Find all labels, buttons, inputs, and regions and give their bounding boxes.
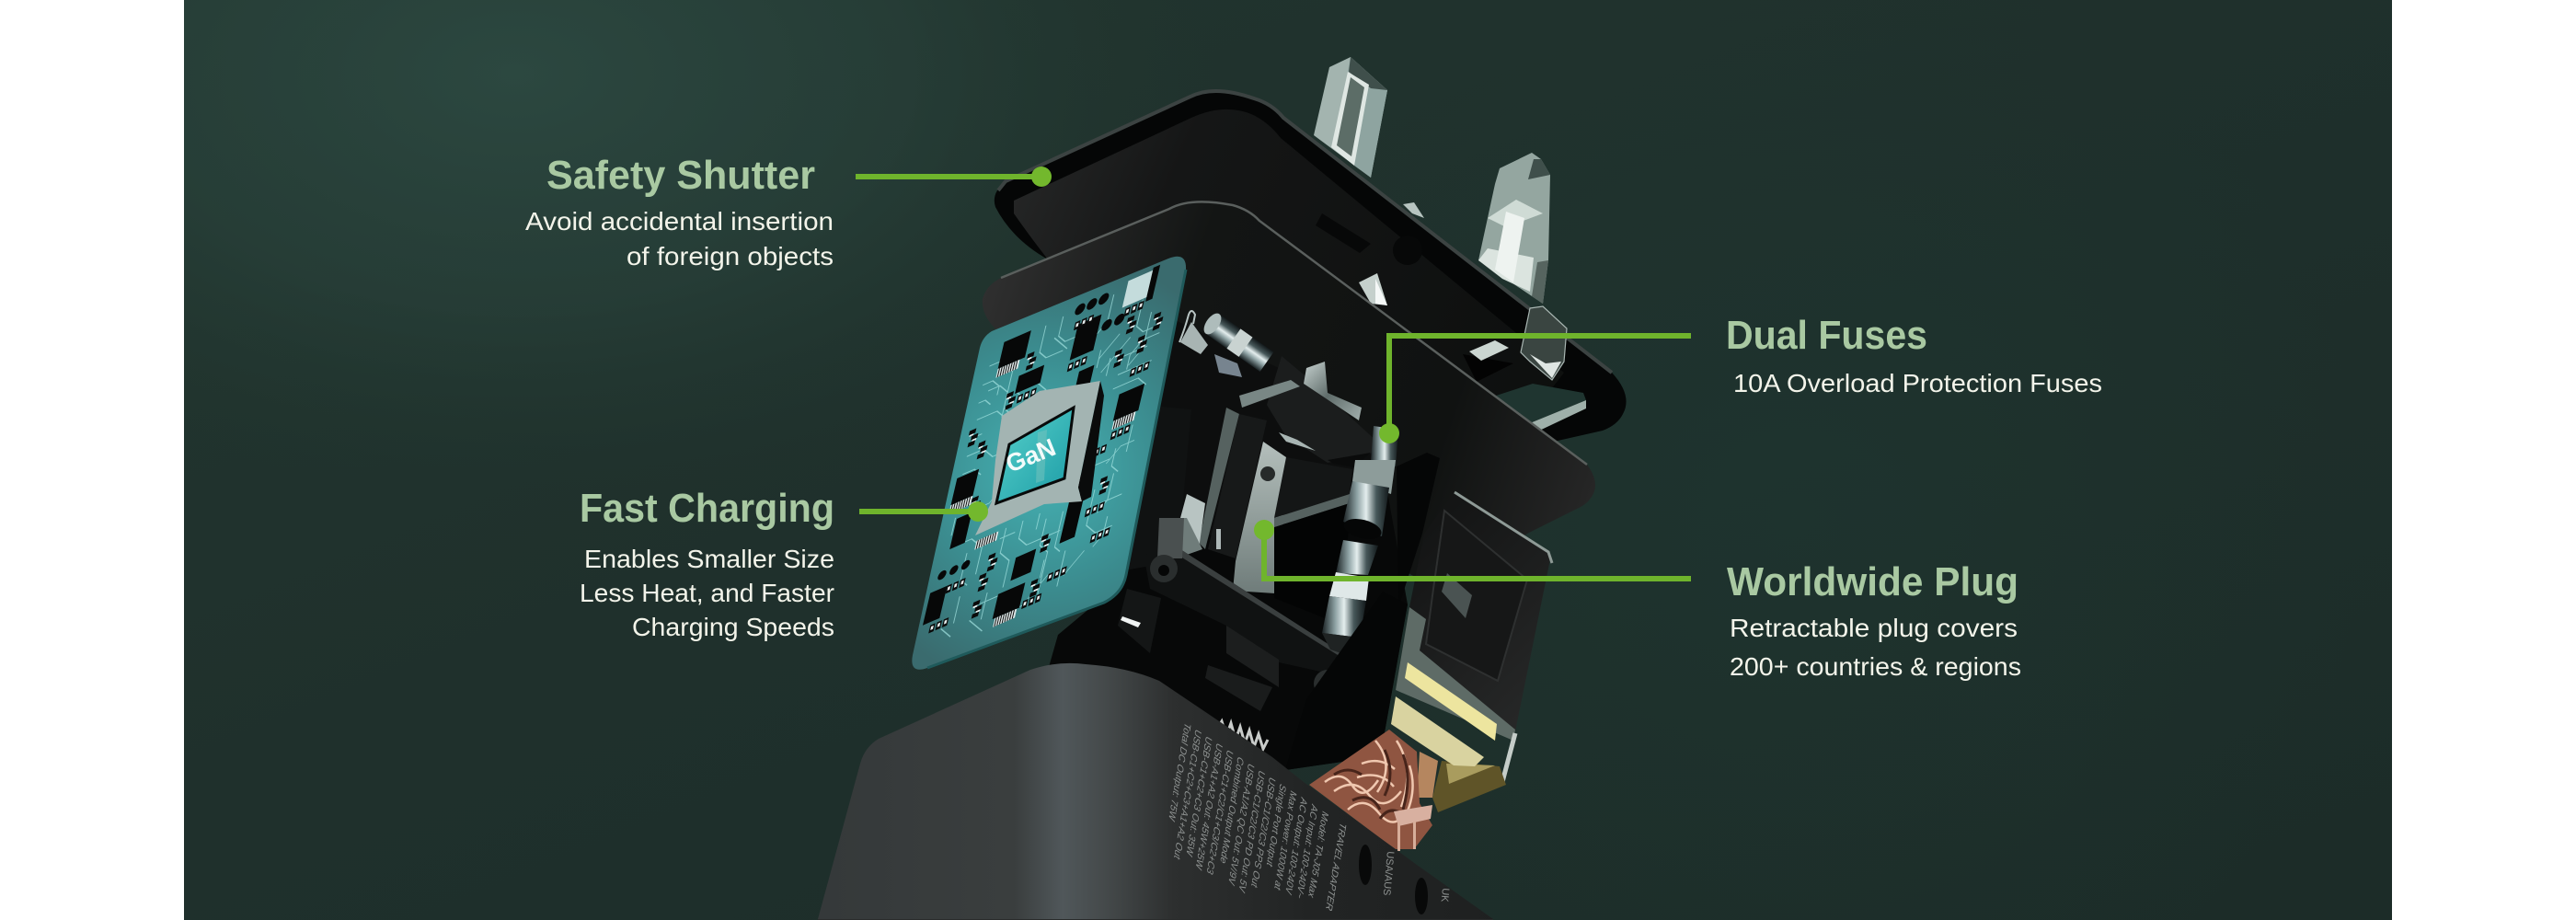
exploded adapter product illustration [818, 57, 1627, 920]
printed specification text: USB-C1/C2/C3 PPS Out [1249, 775, 1277, 890]
description: worldwide plug [1730, 614, 2021, 681]
plug blade right [1478, 153, 1550, 304]
printed specification text: USB-C1/C2/C3 PD Out: 5V [1236, 768, 1266, 895]
region labels [1381, 851, 1451, 903]
printed specification text: USB-C1+C2+C3+A1+A2 Out [1172, 727, 1202, 861]
heading: safety shutter: Safety Shutter [546, 153, 815, 198]
GaN chip with metal frame [975, 381, 1104, 535]
top safety shutter plate [995, 91, 1627, 443]
printed specification text: Total DC Output: 75W [1167, 720, 1192, 823]
cross beam with knobs [1118, 518, 1383, 749]
lower adapter housing with printed specs [818, 663, 1493, 920]
printed specification text: USB-C1+C2/C1+C3/C2+C3 [1204, 747, 1235, 877]
printed specification text: USB-A1/A2 QC Out: 5V/9V [1226, 761, 1256, 888]
leader line: safety shutter [856, 167, 1052, 187]
leader line: dual fuses [1379, 336, 1691, 443]
description: fast charging: Enables Smaller Size [584, 545, 834, 573]
board components [914, 258, 1177, 661]
description: worldwide plug: 200+ countries & regions [1730, 652, 2021, 681]
black bracket [1285, 592, 1408, 770]
printed specification text: USB-A1+A2 Out: 45W+25W [1193, 741, 1224, 872]
internal mechanism [1049, 310, 1408, 770]
vertical frame post [1124, 405, 1267, 570]
copper coil transformer [1309, 696, 1506, 851]
leader line: worldwide plug [1254, 520, 1691, 579]
description: safety shutter: Avoid accidental insertion [525, 207, 834, 236]
second plate [983, 201, 1595, 589]
region labels: USA/AUS [1381, 851, 1396, 896]
fuse clips and upper frame [1239, 356, 1377, 467]
heading: fast charging: Fast Charging [580, 486, 834, 531]
vertical fuse [1322, 426, 1398, 658]
printed specification text: USB-C1+C2+C3 Out: 35W [1184, 734, 1213, 859]
printed specification text: AC Input: 100-240V~ [1294, 802, 1319, 902]
plug blade left [1314, 57, 1387, 178]
heading: worldwide plug: Worldwide Plug [1727, 559, 2018, 604]
description: fast charging: Less Heat, and Faster [580, 579, 834, 607]
upper fuse [1179, 310, 1273, 377]
silver carrier panel [1233, 442, 1352, 626]
GaN circuit board [912, 257, 1186, 670]
callout: fast charging [580, 486, 988, 641]
leader line: fast charging [859, 501, 988, 522]
shutter opening [1490, 384, 1586, 425]
description: fast charging: Charging Speeds [632, 613, 834, 641]
printed specification text: TRAVEL ADAPTER [1324, 820, 1348, 914]
glass blade base [1521, 306, 1567, 380]
description: safety shutter [525, 207, 834, 270]
description: safety shutter: of foreign objects [627, 242, 834, 270]
printed specification text: Single Port Output [1264, 781, 1287, 868]
printed specification text: AC Output: 100-240V [1283, 795, 1308, 897]
GaN chip with metal frame: GaN [1002, 433, 1060, 478]
description: fast charging [580, 545, 834, 641]
shutter details [1316, 202, 1513, 382]
description: dual fuses: 10A Overload Protection Fuses [1733, 369, 2102, 397]
description: worldwide plug: Retractable plug covers [1730, 614, 2018, 642]
printed specification text [1161, 720, 1348, 920]
circuit traces [919, 268, 1175, 659]
printed specification text: Max Power: 1000W at [1272, 788, 1298, 892]
third plate: worldwide plug [1396, 453, 1552, 782]
callout: dual fuses [1379, 313, 2102, 443]
heading: dual fuses: Dual Fuses [1726, 313, 1927, 358]
printed specification text: Model: TA-J05 Max [1306, 809, 1329, 901]
callout: safety shutter [525, 153, 1052, 270]
region labels: UK [1439, 888, 1451, 903]
printed specification text: Combined Output Mode [1218, 754, 1245, 866]
callout: worldwide plug [1254, 520, 2021, 681]
plug slide slots [1359, 845, 1428, 914]
